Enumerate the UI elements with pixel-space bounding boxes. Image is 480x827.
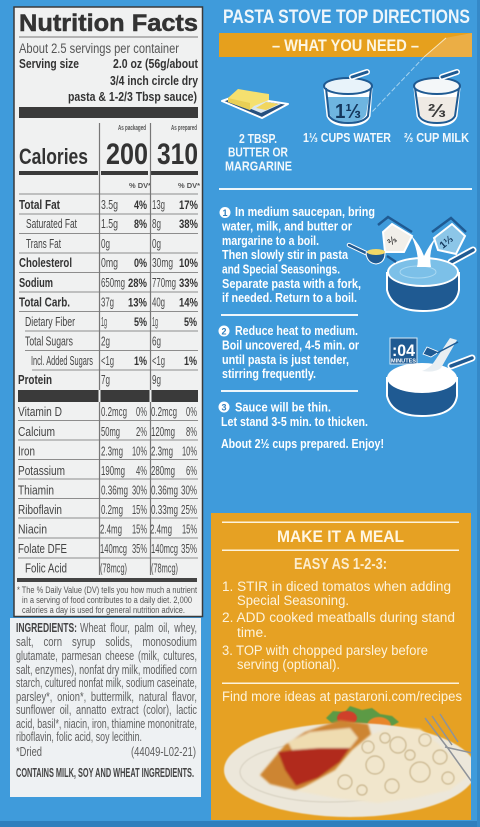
row: saturated fat: 1.5g	[101, 217, 118, 231]
row: potassium: 190mg	[101, 464, 125, 478]
step 2	[218, 324, 359, 381]
row: vitamin d: 0%	[136, 405, 147, 419]
icon: saucepan with pouring cups: ⅔	[386, 235, 399, 248]
ingredients list: parsley*, onion*, buttermilk, natural flavor,	[16, 689, 197, 704]
row: calcium	[18, 424, 197, 439]
row: potassium	[18, 463, 197, 478]
row: added sugars: <1g	[152, 354, 165, 368]
row: folic acid: Folic Acid	[25, 560, 67, 576]
row: folic acid: (78mcg)	[100, 562, 127, 576]
row: trans fat: Trans Fat	[26, 236, 61, 251]
step 1: Separate pasta with a fork,	[222, 277, 361, 291]
row: calcium: 8%	[186, 425, 197, 439]
step 1: margarine to a boil.	[222, 234, 319, 248]
ingredients list: glutamate, parmesan cheese (milk, cultures,	[16, 648, 197, 663]
footnote: in a serving of food contributes to a daily diet. 2,000	[22, 595, 192, 605]
step 2: Boil uncovered, 4-5 min. or	[222, 338, 359, 352]
row: total carb	[19, 296, 198, 310]
ingredients list: (44049-L02-21)	[131, 744, 196, 759]
ingredients list: starch, cultured nonfat milk, sodium caseinate,	[16, 675, 197, 690]
step 1: In medium saucepan, bring	[235, 205, 375, 219]
step 3	[218, 400, 368, 429]
icon: milk measuring cup	[414, 72, 460, 125]
step 2: Reduce heat to medium.	[235, 324, 358, 338]
row: trans fat	[26, 236, 161, 251]
panel: ingredients	[10, 618, 201, 797]
servings per container: About 2.5 servings per container	[19, 41, 179, 56]
row: saturated fat	[26, 216, 198, 231]
row: folic acid	[25, 560, 178, 576]
step 3: 3	[222, 402, 227, 412]
row: saturated fat: Saturated Fat	[26, 216, 77, 231]
row: vitamin d: 0%	[186, 405, 197, 419]
row: cholesterol: 0mg	[101, 256, 118, 270]
ingredients list: sunflower oil, annatto extract (color), lactic	[16, 702, 197, 717]
meal subheading: EASY AS 1-2-3:	[294, 556, 387, 573]
footnote: calories a day is used for general nutrition advice.	[22, 605, 185, 615]
row: folate: 140mcg	[100, 542, 127, 556]
row: vitamin d: 0.2mcg	[151, 405, 177, 419]
step 2: 2	[222, 326, 227, 336]
row: dietary fiber	[25, 314, 197, 329]
row: iron: Iron	[18, 444, 35, 458]
row: vitamin d	[18, 404, 197, 419]
row: total carb: 13%	[128, 296, 147, 310]
recipes link: Find more ideas at pastaroni.com/recipes	[222, 689, 462, 704]
ingredients list: INGREDIENTS:	[16, 621, 77, 635]
row: added sugars	[31, 353, 197, 368]
serving size	[19, 57, 199, 104]
row: trans fat: 0g	[101, 237, 110, 251]
row: total fat: 17%	[179, 198, 198, 212]
footnote: * The % Daily Value (DV) tells you how much a nutrient	[17, 585, 197, 595]
step 1: water, milk, and butter or	[221, 220, 352, 234]
step 1	[220, 205, 375, 305]
icon: timer and stirring saucepan: :04	[392, 341, 416, 360]
row: sodium: Sodium	[19, 276, 53, 290]
row: protein: 7g	[101, 373, 110, 387]
row: vitamin d: Vitamin D	[18, 404, 62, 419]
column headings: As prepared	[171, 125, 197, 132]
row: added sugars: Incl. Added Sugars	[31, 353, 93, 368]
what you need labels	[225, 130, 470, 174]
row: protein: 9g	[152, 373, 161, 387]
row: total fat: 4%	[134, 198, 147, 212]
calories row: 200	[106, 138, 148, 171]
meal steps: time.	[237, 625, 267, 640]
percent daily value heading: % DV*	[178, 181, 200, 190]
row: sodium: 33%	[179, 276, 198, 290]
row: vitamin d: 0.2mcg	[101, 405, 127, 419]
ingredients list: salt, enzymes), nonfat dry milk, modified corn	[16, 662, 197, 677]
icon: water measuring cup	[324, 72, 372, 125]
ingredients list	[16, 620, 197, 759]
ingredients list: acid, basil*, niacin, iron, thiamine mononitrate,	[16, 716, 197, 731]
row: trans fat: 0g	[152, 237, 161, 251]
step 2: until pasta is just tender,	[222, 353, 349, 367]
meal steps: 1. STIR in diced tomatos when adding	[222, 579, 451, 594]
meal steps: Special Seasoning.	[237, 593, 349, 608]
row: thiamin: 0.36mg	[101, 484, 128, 498]
row: total carb: Total Carb.	[19, 296, 70, 310]
row: cholesterol: 30mg	[152, 256, 173, 270]
row: calcium: 2%	[136, 425, 147, 439]
row: dietary fiber: 5%	[134, 315, 147, 329]
row: calcium: Calcium	[18, 424, 55, 439]
row: niacin: Niacin	[18, 522, 47, 536]
row: cholesterol	[19, 256, 198, 270]
what you need labels: MARGARINE	[225, 158, 292, 174]
row: thiamin: 30%	[181, 484, 197, 498]
row: thiamin: 0.36mg	[151, 484, 178, 498]
icon: saucepan with pouring cups: 1⅓	[438, 234, 456, 251]
row: niacin: 2.4mg	[100, 522, 122, 536]
step 1: and Special Seasonings.	[222, 262, 340, 276]
meal steps: serving (optional).	[237, 657, 340, 672]
row: saturated fat: 8%	[134, 217, 147, 231]
row: riboflavin: 15%	[132, 503, 147, 517]
serving size: 3/4 inch circle dry	[110, 74, 198, 88]
ingredients list: salt, corn syrup solids, monosodium	[16, 634, 197, 649]
ingredients list: riboflavin, folic acid, soy lecithin.	[16, 729, 142, 744]
step 3: Let stand 3-5 min. to thicken.	[221, 415, 368, 429]
row: dietary fiber: 1g	[152, 315, 158, 329]
row: niacin: 15%	[182, 522, 197, 536]
icon: milk measuring cup: ⅔	[428, 101, 446, 121]
row: iron: 10%	[182, 444, 197, 458]
row: added sugars: 1%	[184, 354, 197, 368]
icon: water measuring cup: 1⅓	[335, 101, 361, 123]
icon: timer and stirring saucepan	[387, 338, 472, 416]
row: saturated fat: 8g	[152, 217, 161, 231]
row: total fat	[19, 198, 198, 212]
meal steps: 3. TOP with chopped parsley before	[222, 643, 428, 658]
column headings: As packaged	[118, 125, 146, 132]
row: iron	[18, 444, 197, 458]
allergen statement: CONTAINS MILK, SOY AND WHEAT INGREDIENTS.	[16, 766, 194, 780]
column headings	[118, 125, 197, 132]
calories row: 310	[157, 138, 198, 171]
row: calcium: 50mg	[101, 425, 120, 439]
row: cholesterol: 0%	[134, 256, 147, 270]
calories row: Calories	[19, 144, 88, 169]
row: sodium: 650mg	[101, 276, 125, 290]
what you need labels: 2 TBSP.	[239, 131, 277, 146]
row: sodium	[19, 276, 198, 290]
percent daily value heading: % DV*	[129, 181, 151, 190]
what you need banner	[219, 33, 472, 57]
serving size: 2.0 oz (56g/about	[113, 57, 199, 71]
what you need labels: ⅔ CUP MILK	[404, 130, 470, 145]
row: folic acid: (78mcg)	[151, 562, 178, 576]
row: riboflavin: 0.2mg	[101, 503, 123, 517]
ingredients list: *Dried	[16, 744, 42, 759]
serving size: pasta & 1-2/3 Tbsp sauce)	[68, 90, 197, 104]
meal heading: MAKE IT A MEAL	[277, 527, 404, 546]
step 1: Then slowly stir in pasta	[222, 248, 349, 262]
icon: timer and stirring saucepan: MINUTES	[391, 358, 417, 364]
row: total sugars: 6g	[152, 334, 161, 348]
row: potassium: 280mg	[151, 464, 175, 478]
what you need labels: 1⅓ CUPS WATER	[303, 130, 392, 145]
row: dietary fiber: Dietary Fiber	[25, 314, 75, 329]
row: added sugars: 1%	[134, 354, 147, 368]
photo: plated meal	[224, 706, 476, 817]
row: total carb: 14%	[179, 296, 198, 310]
yield note: About 2½ cups prepared. Enjoy!	[221, 437, 384, 451]
row: thiamin: 30%	[132, 484, 147, 498]
row: dietary fiber: 5%	[184, 315, 197, 329]
row: sodium: 28%	[128, 276, 147, 290]
ingredients list: Wheat flour, palm oil, whey,	[80, 620, 197, 635]
panel: nutrition facts	[14, 7, 202, 616]
row: calcium: 120mg	[151, 425, 175, 439]
row: potassium: 4%	[136, 464, 147, 478]
row: iron: 10%	[132, 444, 147, 458]
row: iron: 2.3mg	[101, 444, 123, 458]
row: thiamin	[18, 482, 197, 498]
step 1: 1	[222, 208, 228, 218]
serving size: Serving size	[19, 57, 79, 71]
row: folate: 35%	[132, 542, 147, 556]
row: sodium: 770mg	[152, 276, 176, 290]
footnote	[17, 585, 197, 615]
row: riboflavin	[18, 502, 197, 517]
row: total sugars: Total Sugars	[25, 334, 73, 348]
row: thiamin: Thiamin	[18, 482, 54, 498]
icon: saucepan with pouring cups	[349, 217, 473, 311]
step 2: stirring frequently.	[222, 367, 316, 381]
meal steps	[222, 579, 455, 672]
row: cholesterol: 10%	[179, 256, 198, 270]
panel: make it a meal	[211, 513, 476, 820]
icon: butter	[222, 89, 288, 118]
row: total carb: 37g	[101, 296, 114, 310]
row: folate	[18, 541, 197, 556]
row: potassium: 6%	[186, 464, 197, 478]
row: folate: 35%	[181, 542, 197, 556]
row: potassium: Potassium	[18, 463, 65, 478]
row: cholesterol: Cholesterol	[19, 256, 72, 270]
row: niacin	[18, 522, 197, 536]
row: niacin: 2.4mg	[150, 522, 172, 536]
row: added sugars: <1g	[101, 354, 114, 368]
row: total fat: 3.5g	[101, 198, 118, 212]
calories row	[19, 138, 198, 171]
what you need banner: – WHAT YOU NEED –	[272, 36, 419, 55]
step 1: if needed. Return to a boil.	[222, 291, 357, 305]
row: protein	[18, 373, 161, 387]
row: total sugars: 2g	[101, 334, 110, 348]
percent daily value heading	[129, 181, 200, 190]
row: folate: 140mcg	[151, 542, 178, 556]
row: total fat: 13g	[152, 198, 165, 212]
what you need labels: BUTTER OR	[228, 144, 288, 160]
row: riboflavin: Riboflavin	[18, 502, 62, 517]
meal steps: 2. ADD cooked meatballs during stand	[222, 610, 455, 625]
row: riboflavin: 25%	[181, 503, 197, 517]
row: saturated fat: 38%	[179, 217, 198, 231]
row: total sugars	[25, 334, 161, 348]
row: total fat: Total Fat	[19, 198, 61, 212]
row: folate: Folate DFE	[18, 541, 67, 556]
row: protein: Protein	[18, 373, 52, 387]
row: riboflavin: 0.33mg	[151, 503, 178, 517]
row: total carb: 40g	[152, 296, 165, 310]
row: niacin: 15%	[132, 522, 147, 536]
nutrition title: Nutrition Facts	[19, 10, 198, 37]
row: iron: 2.3mg	[151, 444, 173, 458]
row: dietary fiber: 1g	[101, 315, 107, 329]
step 3: Sauce will be thin.	[235, 400, 331, 414]
